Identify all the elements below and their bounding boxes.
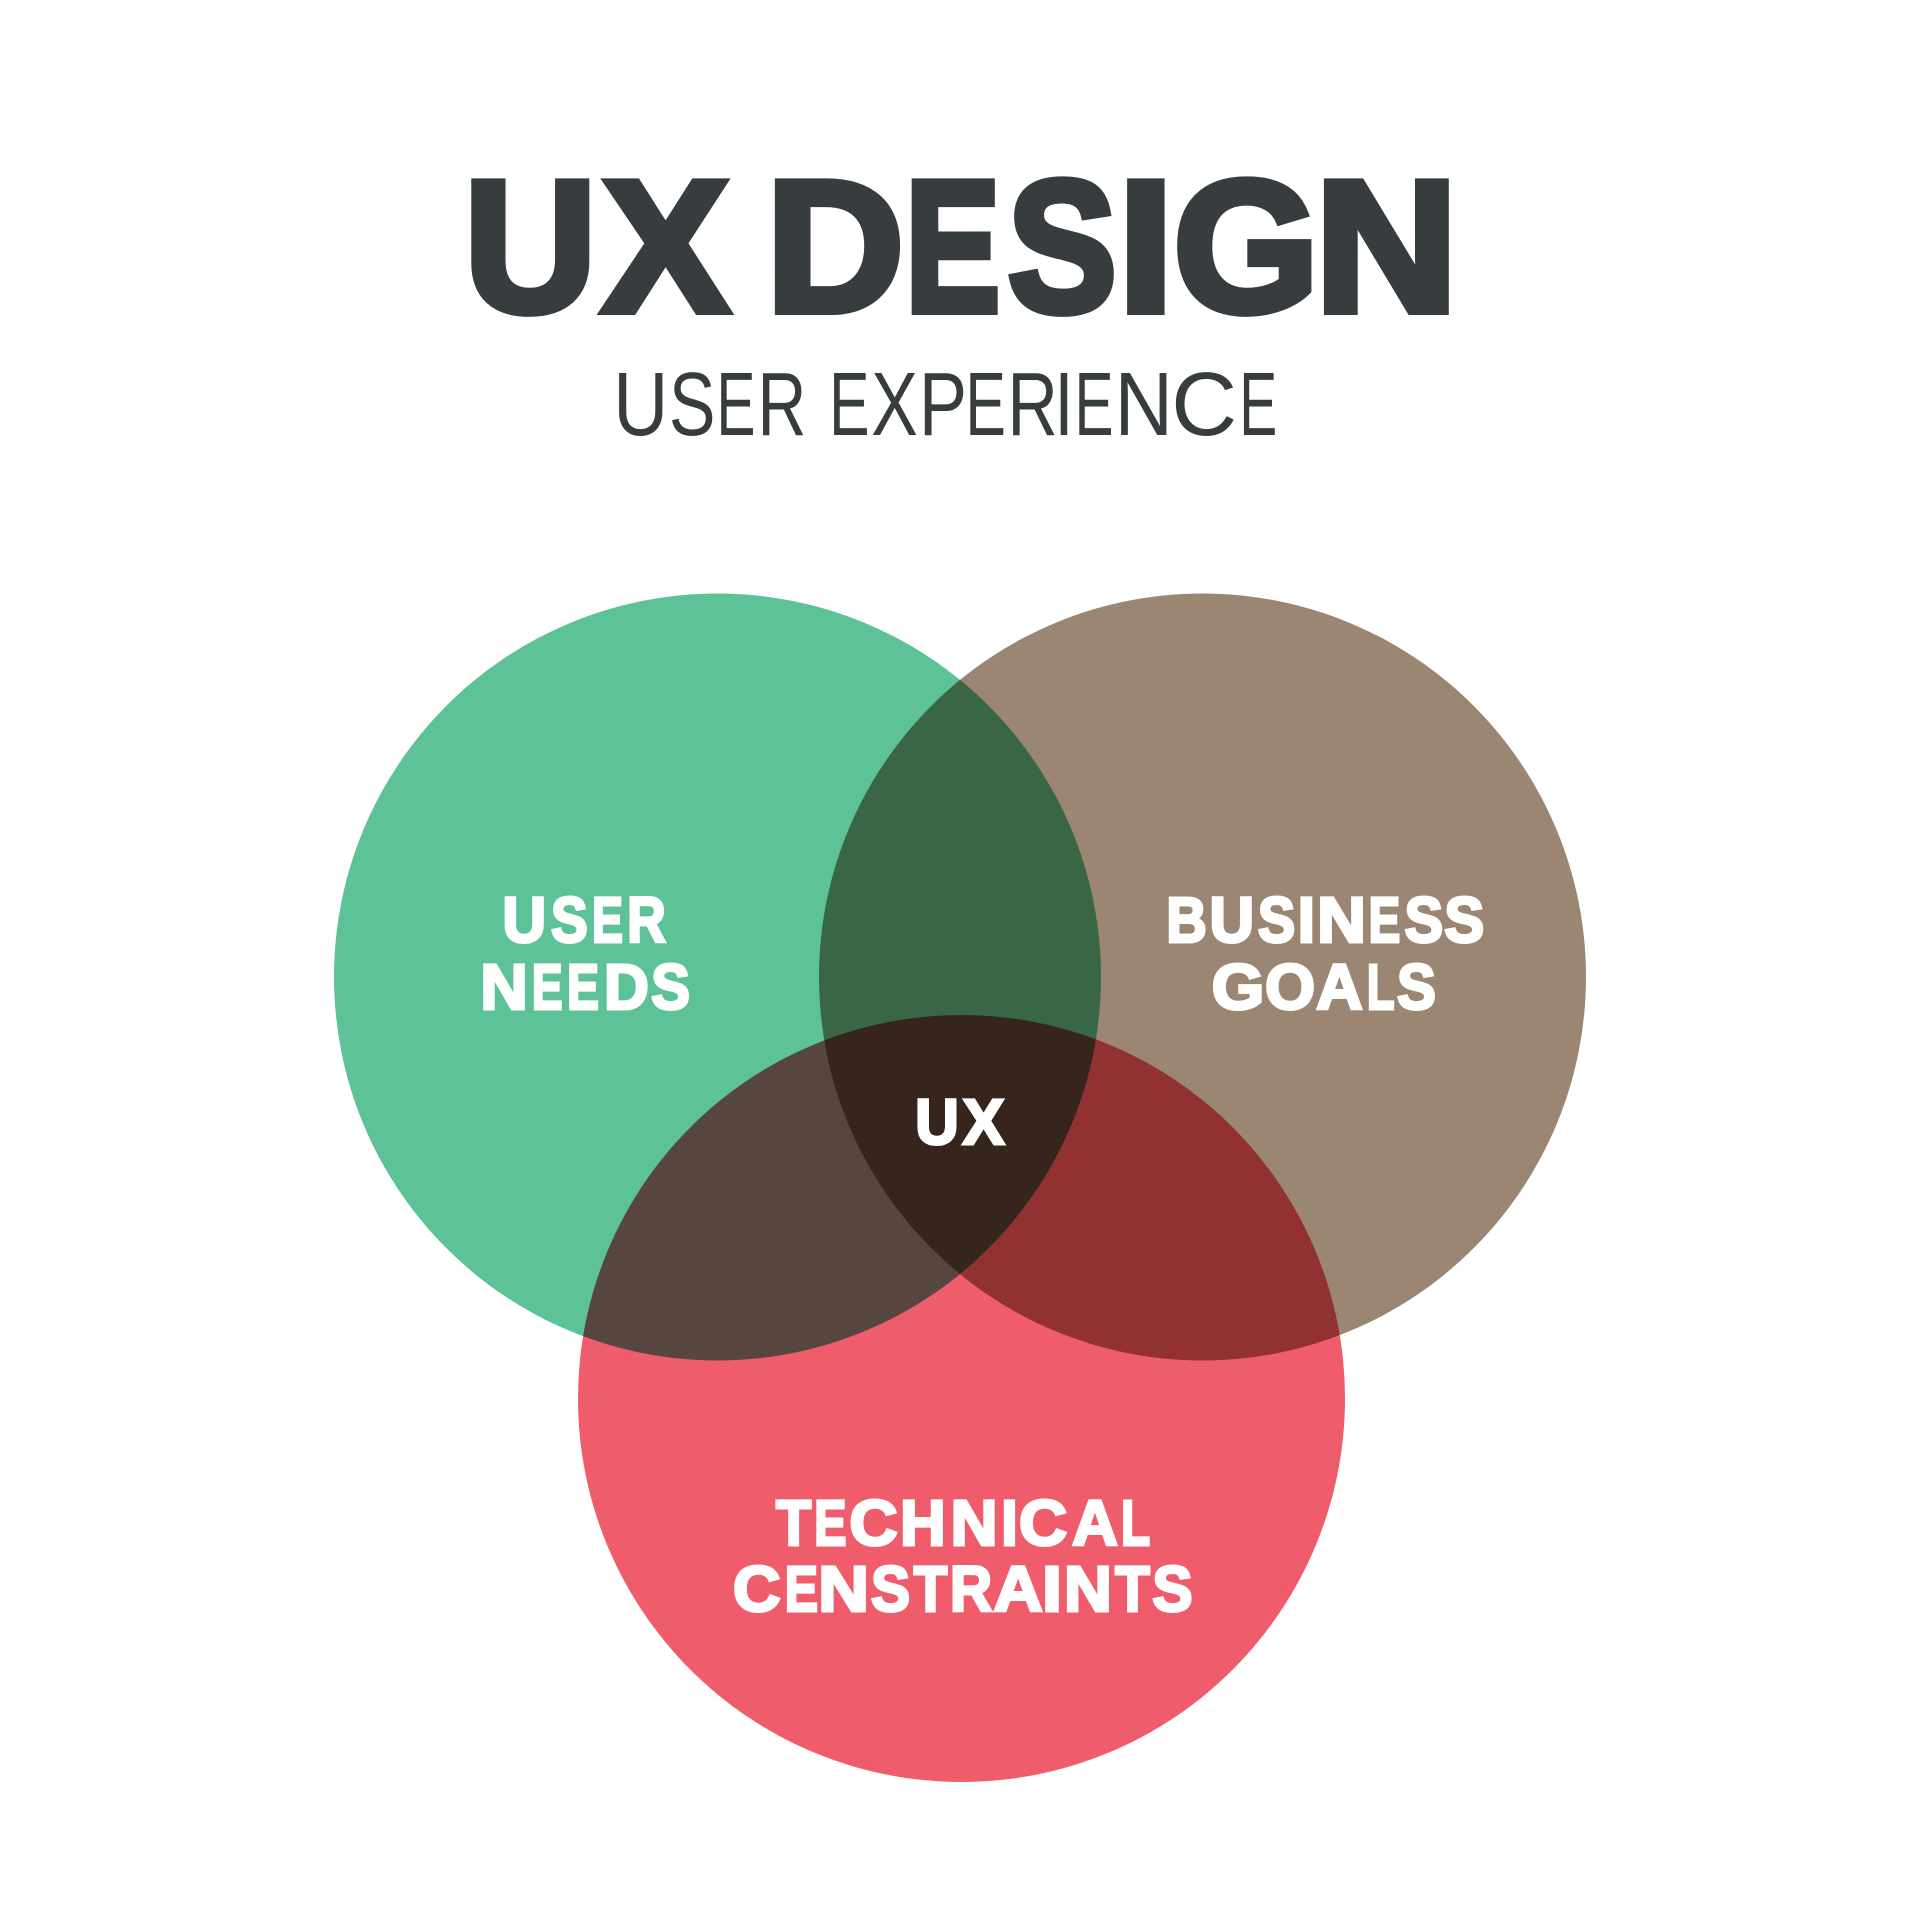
label: UX centre: X xyxy=(963,1086,1005,1158)
label: business goals: S xyxy=(1444,884,1484,956)
label: technical constraints: I xyxy=(1042,1553,1062,1625)
label: business goals: A xyxy=(1316,951,1362,1023)
subtitle: P xyxy=(919,355,967,455)
label: business goals: G xyxy=(1212,951,1264,1023)
label: business goals: O xyxy=(1265,951,1315,1023)
label: user needs: S xyxy=(551,884,588,956)
subtitle: E xyxy=(829,355,870,455)
label: business goals: I xyxy=(1298,884,1315,956)
label: user needs: R xyxy=(627,884,666,956)
title: N xyxy=(1315,142,1458,351)
label: business goals: S xyxy=(1258,884,1295,956)
subtitle: E xyxy=(1074,355,1114,455)
label: technical constraints: E xyxy=(785,1553,818,1625)
label: user needs xyxy=(480,884,690,1023)
label: technical constraints xyxy=(733,1487,1193,1625)
label: technical constraints: C xyxy=(849,1487,898,1559)
label: user needs: D xyxy=(604,951,649,1023)
label: user needs: E xyxy=(532,951,563,1023)
label: technical constraints: T xyxy=(1115,1553,1150,1625)
subtitle: U xyxy=(613,355,668,455)
venn diagram xyxy=(334,594,1586,1782)
label: technical constraints: N xyxy=(1064,1553,1112,1625)
circle: technical constraints xyxy=(578,1015,1345,1782)
label: user needs: E xyxy=(592,884,623,956)
subtitle: E xyxy=(1239,355,1277,455)
label: technical constraints: R xyxy=(950,1553,992,1625)
label: user needs: S xyxy=(651,951,690,1023)
label: technical constraints: N xyxy=(818,1553,869,1625)
subtitle: E xyxy=(716,355,756,455)
title: D xyxy=(766,142,904,351)
label: business goals: B xyxy=(1166,884,1207,956)
label: technical constraints: I xyxy=(1001,1487,1018,1559)
circle: user needs xyxy=(334,594,1101,1360)
title: E xyxy=(905,142,1000,351)
label: business goals xyxy=(1166,884,1484,1023)
label: technical constraints: L xyxy=(1121,1487,1150,1559)
title: G xyxy=(1174,142,1319,351)
label: technical constraints: S xyxy=(871,1553,910,1625)
label: business goals: L xyxy=(1367,951,1394,1023)
subtitle: S xyxy=(669,355,716,455)
subtitle: N xyxy=(1114,355,1173,455)
label: business goals: U xyxy=(1210,884,1254,956)
title: U xyxy=(464,142,597,351)
label: user needs: N xyxy=(480,951,528,1023)
label: technical constraints: A xyxy=(1072,1487,1118,1559)
subtitle: I xyxy=(1054,355,1074,455)
label: UX centre: U xyxy=(915,1086,959,1158)
label: technical constraints: E xyxy=(814,1487,846,1559)
label: technical constraints: N xyxy=(951,1487,998,1559)
label: technical constraints: C xyxy=(733,1553,781,1625)
label: technical constraints: A xyxy=(994,1553,1043,1625)
subtitle: X xyxy=(871,355,918,455)
subtitle: R xyxy=(1007,355,1058,455)
label: business goals: S xyxy=(1404,884,1443,956)
title: X xyxy=(602,142,729,351)
label: business goals: N xyxy=(1317,884,1366,956)
subtitle: C xyxy=(1171,355,1237,455)
label: technical constraints: C xyxy=(1019,1487,1067,1559)
label: business goals: E xyxy=(1369,884,1400,956)
title: I xyxy=(1118,142,1174,351)
circle: business goals xyxy=(819,594,1586,1360)
label: technical constraints: T xyxy=(776,1487,811,1559)
subtitle: E xyxy=(965,355,1006,455)
label: business goals: S xyxy=(1397,951,1436,1023)
label: user needs: U xyxy=(502,884,546,956)
label: technical constraints: S xyxy=(1152,1553,1193,1625)
label: technical constraints: H xyxy=(900,1487,946,1559)
label: technical constraints: T xyxy=(914,1553,947,1625)
title: S xyxy=(1008,142,1117,351)
subtitle: R xyxy=(758,355,806,455)
label: user needs: E xyxy=(567,951,599,1023)
